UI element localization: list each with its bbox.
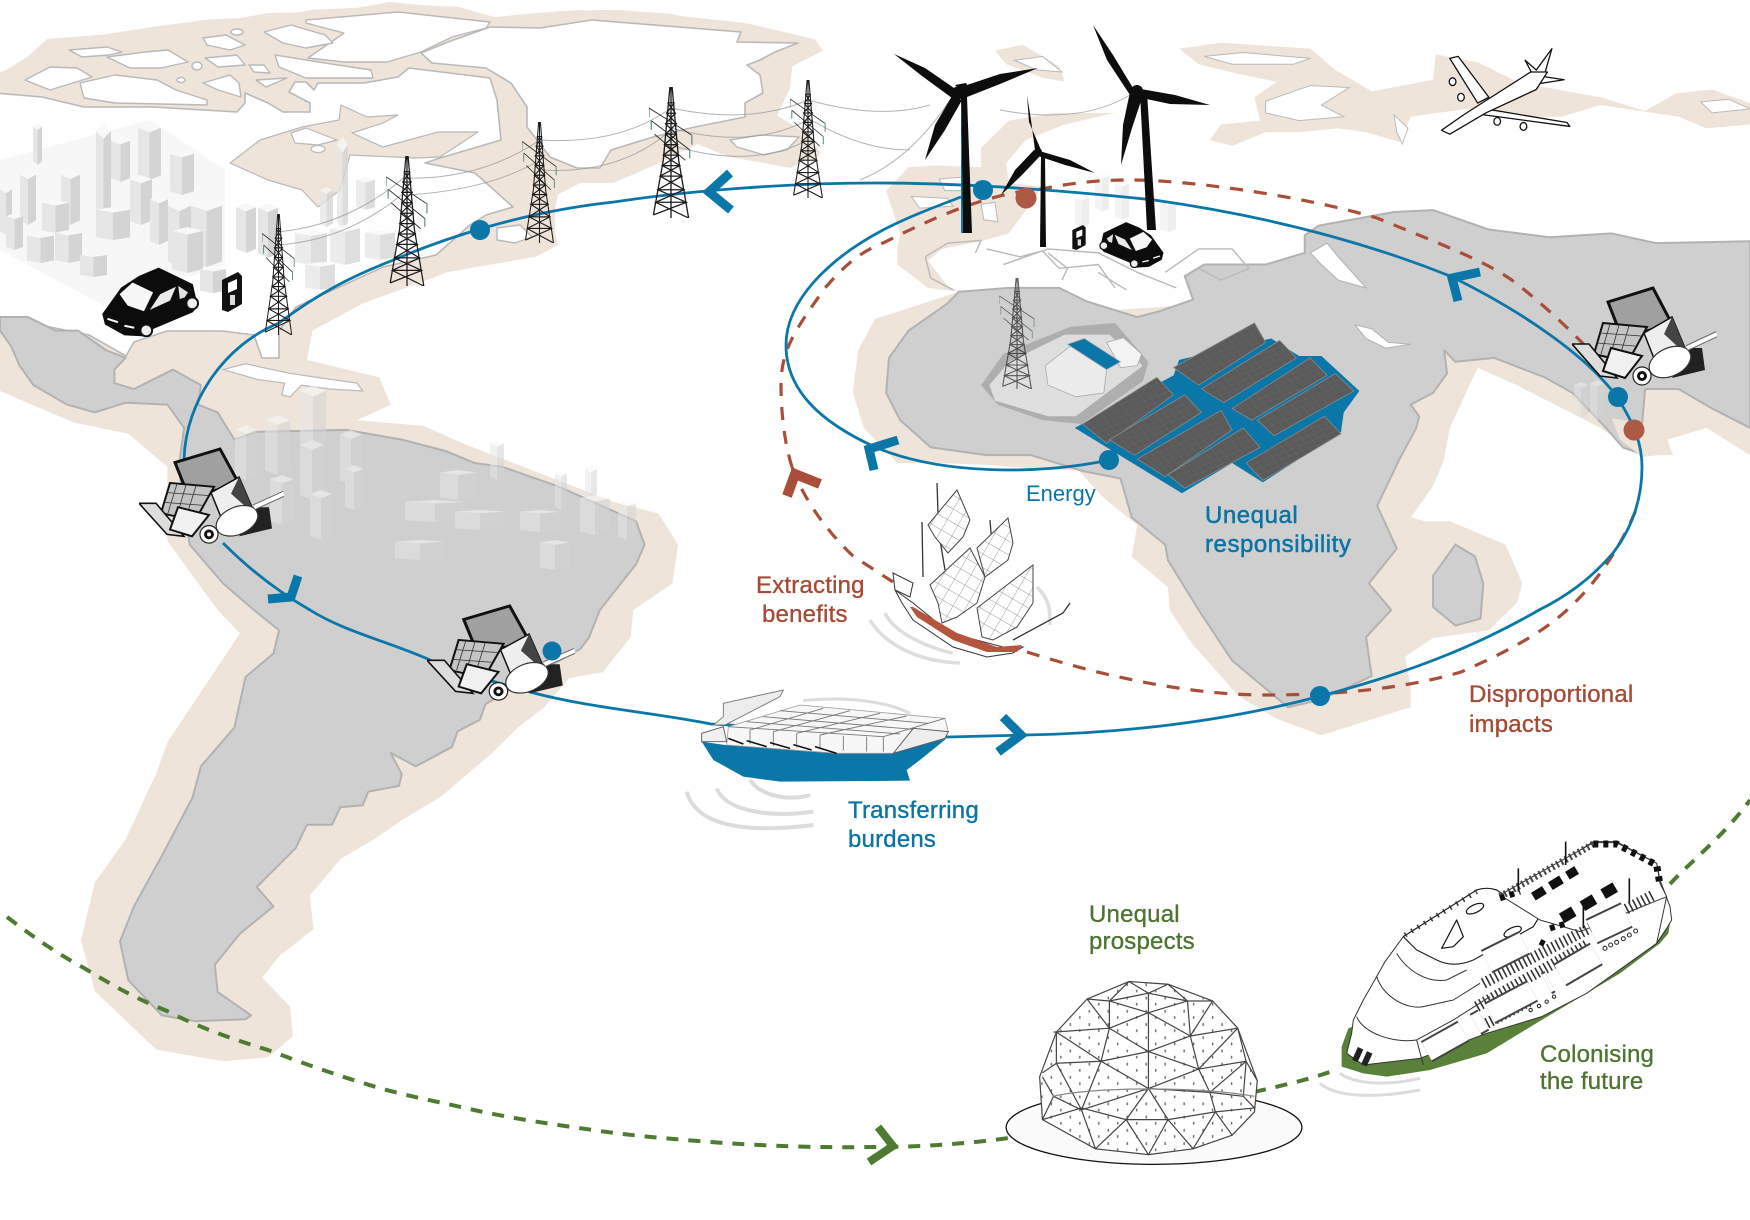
right wing — [1483, 109, 1570, 126]
masts and bowsprit — [922, 483, 1070, 640]
sails — [928, 490, 1033, 640]
icon: e-waste pile west — [139, 449, 284, 543]
land: europe peninsula outlines — [925, 240, 1249, 290]
land: africa and south asia buffer — [853, 292, 1750, 735]
hull — [895, 590, 1023, 657]
city: europe small skyline — [1075, 172, 1176, 232]
land: arctic islands — [25, 12, 799, 243]
city: tower and east coast buildings — [295, 137, 395, 290]
label: unequal prospects: Unequal — [1089, 901, 1180, 928]
land: north eurasia inlets — [1015, 53, 1750, 144]
container grid — [728, 708, 945, 752]
old sailing ship — [870, 483, 1070, 663]
land: greenland — [421, 20, 798, 168]
dome lattice — [1040, 982, 1257, 1155]
route: blue energy loop — [184, 183, 1642, 737]
route dots: blue — [470, 180, 1628, 706]
land: north america mainland — [0, 68, 513, 358]
labels — [756, 481, 1654, 1095]
window rows — [1427, 915, 1627, 1052]
label: unequal responsibility: responsibility — [1205, 531, 1351, 558]
solar farm and substation: africa — [981, 323, 1359, 493]
arrows: blue chevrons — [268, 173, 1480, 752]
land: svalbard buffer — [995, 45, 1065, 82]
land: central and south america — [0, 317, 645, 1021]
city: south asia small skyline — [1574, 380, 1604, 420]
label: unequal responsibility: Unequal — [1205, 502, 1298, 529]
land: arctic buffer — [0, 2, 821, 300]
label: colonising the future: Colonising — [1540, 1041, 1654, 1068]
solar array base — [1075, 338, 1359, 493]
arrow: red chevron — [787, 474, 820, 496]
label: transferring burdens: burdens — [848, 826, 936, 853]
green hull — [1342, 923, 1670, 1077]
ev car and charger: america — [102, 268, 242, 336]
bow deck gear — [1355, 1053, 1373, 1062]
stern castle — [893, 573, 913, 597]
roof railing — [1405, 892, 1477, 935]
power wires — [278, 95, 1130, 245]
land: africa and asia — [886, 210, 1750, 707]
land: hudson bay buffer — [230, 105, 478, 207]
upper roof — [1403, 888, 1538, 964]
pylons: transmission line — [262, 80, 1130, 335]
land: eurasia and africa — [853, 43, 1750, 735]
wake — [687, 699, 910, 828]
cruise ship — [1320, 842, 1672, 1095]
deck tiers — [1357, 897, 1667, 1065]
sundeck — [1500, 843, 1667, 932]
label: transferring burdens: Transferring — [848, 797, 979, 824]
land: south india buffer — [1612, 418, 1673, 457]
balcony railings — [1440, 895, 1653, 1050]
label: extracting benefits: benefits — [762, 601, 848, 628]
airplane — [1441, 49, 1570, 134]
land: caspian and persian seas — [1310, 243, 1411, 348]
tailplane — [1539, 76, 1564, 84]
label: disproportional impacts: Disproportional — [1469, 681, 1633, 708]
label: energy: Energy — [1026, 481, 1096, 506]
wind turbines — [894, 25, 1210, 247]
wake — [1320, 1073, 1420, 1095]
white superstructure — [1347, 842, 1672, 1065]
pylon: africa substation — [999, 278, 1034, 389]
city: north america skyline — [0, 120, 278, 305]
roof hatches — [1442, 901, 1523, 948]
containers — [727, 705, 948, 753]
solar panels — [1083, 323, 1354, 488]
hull red strip — [910, 607, 1022, 652]
fuselage — [1441, 72, 1547, 134]
hull — [702, 738, 947, 782]
arrow: green chevron — [869, 1127, 893, 1162]
turbine: right — [1093, 25, 1210, 230]
dome base ellipse — [1006, 1090, 1302, 1164]
land: americas buffer — [0, 2, 823, 1061]
engines — [1449, 78, 1456, 86]
sundeck railing and furniture — [1500, 842, 1660, 945]
deck rail — [728, 738, 837, 753]
route: green future path — [7, 800, 1750, 1147]
land: britain and ireland — [911, 177, 998, 222]
land: hudson islands — [291, 128, 337, 152]
land: north atlantic and arctic, drawn in pixels — [0, 2, 821, 358]
container ship — [687, 690, 948, 828]
land: madagascar — [1433, 545, 1483, 626]
route dots: red — [1016, 188, 1644, 440]
portholes — [1529, 929, 1638, 1012]
city: south america buildings — [235, 385, 636, 570]
icon: e-waste pile brazil — [427, 606, 575, 700]
substation buildings — [1045, 338, 1142, 397]
substation pad — [981, 323, 1148, 424]
label: unequal prospects: prospects — [1089, 928, 1195, 955]
label: colonising the future: the future — [1540, 1068, 1643, 1095]
label: disproportional impacts: impacts — [1469, 711, 1553, 738]
wake — [870, 587, 1050, 663]
label: extracting benefits: Extracting — [756, 572, 865, 599]
tail fin — [1525, 49, 1552, 74]
route: red extraction path — [781, 180, 1639, 695]
turbine: left — [894, 54, 1038, 233]
land: europe coastal buffer — [886, 113, 1115, 292]
icon: e-waste pile south asia — [1572, 288, 1717, 385]
ev car and charger: europe — [1072, 222, 1163, 268]
left wing — [1450, 56, 1489, 103]
geodesic dome — [1006, 982, 1302, 1164]
land: north eurasia coast — [1179, 43, 1750, 146]
turbine: centre — [1001, 95, 1095, 247]
bridge — [713, 690, 783, 725]
